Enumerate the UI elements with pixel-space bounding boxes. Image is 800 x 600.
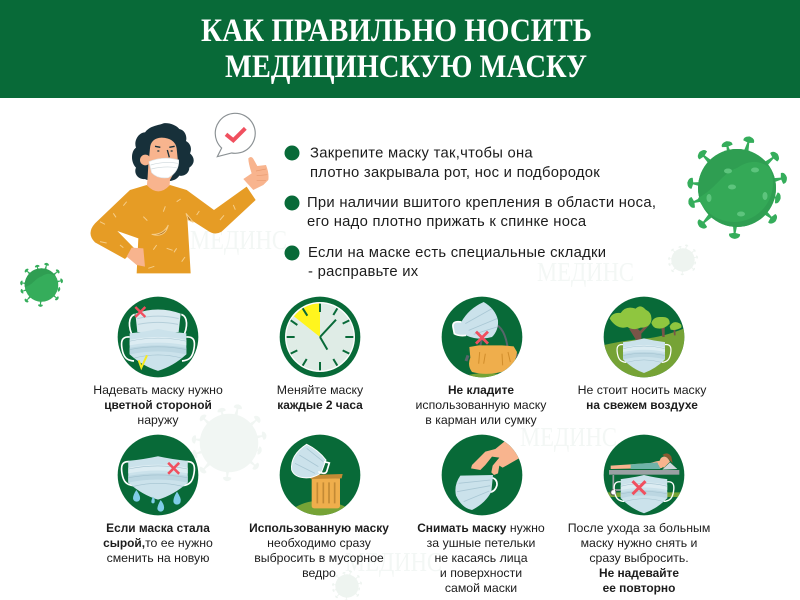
caption 1: наружу xyxy=(137,413,179,427)
caption 7: самой маски xyxy=(445,581,517,595)
caption 8: Не надевайте xyxy=(599,566,679,580)
caption 8: После ухода за больным xyxy=(568,521,710,535)
bullet 3: - расправьте их xyxy=(308,264,419,280)
caption 2: каждые 2 часа xyxy=(277,398,363,412)
watermarks: МЕДИНС xyxy=(537,257,634,287)
watermarks xyxy=(190,225,698,600)
bullet 2 xyxy=(284,195,656,230)
header band xyxy=(0,0,800,98)
caption 6: ведро xyxy=(302,566,336,580)
bullet 2: его надо плотно прижать к спинке носа xyxy=(307,214,587,230)
caption 5: сырой,то ее нужно xyxy=(103,536,213,550)
icon: not outdoors xyxy=(602,297,687,379)
caption 1: Надевать маску нужно xyxy=(93,383,223,397)
virus: small xyxy=(20,262,63,307)
bullet 1 xyxy=(284,146,600,181)
bullet 3: Если на маске есть специальные складки xyxy=(308,245,606,261)
face and neck xyxy=(140,138,178,194)
caption 4: на свежем воздухе xyxy=(586,398,698,412)
caption 6: выбросить в мусорное xyxy=(254,551,384,565)
watermarks: МЕДИНС xyxy=(520,422,617,452)
bullet 1: Закрепите маску так,чтобы она xyxy=(310,146,533,162)
bullet list xyxy=(284,146,656,280)
mask over bag xyxy=(453,302,498,339)
icon: clock xyxy=(280,297,360,377)
icon: colored side out xyxy=(118,297,198,377)
caption 3: использованную маску xyxy=(416,398,547,412)
check mark xyxy=(226,128,245,140)
speech bubble xyxy=(215,113,255,157)
caption 8: маску нужно снять и xyxy=(581,536,698,550)
caption 7: Снимать маску нужно xyxy=(417,521,545,535)
icon: not in bag xyxy=(442,297,522,379)
icon: patient on gurney xyxy=(602,435,686,515)
sweater xyxy=(90,185,256,273)
finger lines xyxy=(256,169,267,180)
watermarks: МЕДИНС xyxy=(190,225,287,255)
icon: wet mask xyxy=(118,435,198,515)
caption 6: Использованную маску xyxy=(249,521,389,535)
bullet 2: При наличии вшитого крепления в области носа, xyxy=(307,195,656,211)
hands xyxy=(127,157,269,267)
drops xyxy=(133,490,181,512)
caption 2: Меняйте маску xyxy=(277,383,364,397)
title: КАК ПРАВИЛЬНО НОСИТЬ xyxy=(201,13,592,49)
icon: taking off mask xyxy=(442,435,522,515)
bullet 3 xyxy=(284,245,606,280)
caption 1: цветной стороной xyxy=(104,398,212,412)
bullet 1: плотно закрывала рот, нос и подбородок xyxy=(310,165,600,181)
virus: large xyxy=(687,135,788,239)
caption 8: ее повторно xyxy=(603,581,675,595)
illustration: woman in mask with thumbs up xyxy=(90,113,269,273)
caption 3: Не кладите xyxy=(448,383,514,397)
caption 5: Если маска стала xyxy=(106,521,210,535)
caption 7: и поверхности xyxy=(440,566,522,580)
mask pleats xyxy=(151,162,178,169)
caption 7: не касаясь лица xyxy=(434,551,528,565)
face mask xyxy=(149,158,179,178)
caption 8: сразу выбросить. xyxy=(589,551,689,565)
title xyxy=(201,13,592,85)
caption 4: Не стоит носить маску xyxy=(578,383,707,397)
eyes and brows xyxy=(155,146,175,157)
caption 5: сменить на новую xyxy=(107,551,209,565)
hair xyxy=(132,123,194,181)
caption 6: необходимо сразу xyxy=(267,536,372,550)
icon: trash bin xyxy=(280,435,362,517)
watermarks: МЕДИНС xyxy=(345,547,442,577)
caption 7: за ушные петельки xyxy=(427,536,535,550)
title: МЕДИЦИНСКУЮ МАСКУ xyxy=(225,49,587,85)
sweater details xyxy=(100,199,235,268)
caption 3: в карман или сумку xyxy=(425,413,538,427)
